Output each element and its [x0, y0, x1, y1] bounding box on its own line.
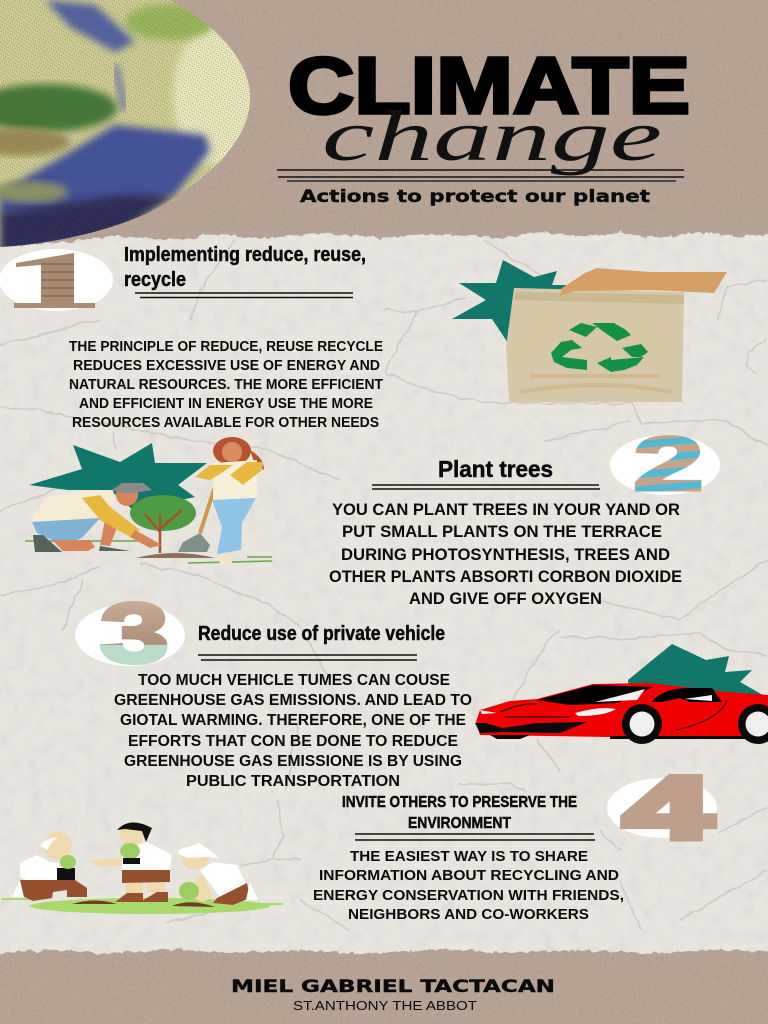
footer: school name: ST.ANTHONY THE ABBOT — [293, 998, 477, 1013]
text block: reduce private vehicle — [114, 672, 472, 790]
text block: reduce private vehicle: GREENHOUSE GAS EMISSIONE IS BY USING — [124, 753, 462, 770]
text block: reduce private vehicle: PUBLIC TRANSPORTATION — [186, 773, 400, 790]
text block: reduce reuse recycle: RESOURCES AVAILABLE FOR OTHER NEEDS — [72, 415, 379, 431]
text block: reduce reuse recycle: AND EFFICIENT IN ENERGY USE THE MORE — [79, 396, 373, 412]
illustration: three people planting seedlings — [2, 822, 283, 914]
text block: reduce reuse recycle: NATURAL RESOURCES. THE MORE EFFICIENT — [69, 377, 383, 393]
text block: plant trees: AND GIVE OFF OXYGEN — [409, 589, 602, 608]
heading: reduce reuse recycle — [124, 244, 366, 298]
number badge 4: 4 — [624, 758, 712, 857]
title rule lines — [277, 170, 684, 181]
text block: invite others: INFORMATION ABOUT RECYCLING AND — [319, 868, 619, 884]
heading: invite others — [342, 794, 595, 840]
text block: plant trees: DURING PHOTOSYNTHESIS, TREES AND — [341, 545, 670, 564]
text block: reduce private vehicle: GREENHOUSE GAS EMISSIONS. AND LEAD TO — [114, 692, 472, 709]
text block: reduce reuse recycle: THE PRINCIPLE OF REDUCE, REUSE RECYCLE — [69, 339, 383, 355]
heading: invite others: INVITE OTHERS TO PRESERVE THE — [342, 794, 577, 811]
number badge 1 — [0, 249, 113, 311]
heading: plant trees: Plant trees — [438, 456, 553, 482]
text block: plant trees: PUT SMALL PLANTS ON THE TERRACE — [342, 522, 662, 541]
text block: plant trees — [329, 500, 682, 608]
heading: reduce reuse recycle: recycle — [124, 269, 186, 291]
number badge 2: 2 — [633, 422, 704, 507]
text block: reduce private vehicle: EFFORTS THAT CON BE DONE TO REDUCE — [128, 733, 458, 750]
heading: reduce reuse recycle: Implementing reduce, reuse, — [124, 244, 366, 266]
number badge 4 — [607, 758, 717, 857]
text block: reduce private vehicle: TOO MUCH VEHICLE TUMES CAN COUSE — [138, 672, 450, 689]
text block: invite others: THE EASIEST WAY IS TO SHARE — [350, 849, 588, 865]
header torn paper band — [0, 0, 768, 245]
icon: earth globe halftone — [0, 0, 260, 255]
heading: reduce private vehicle: Reduce use of private vehicle — [198, 623, 445, 645]
illustration: couple planting a tree — [25, 437, 272, 565]
number badge 3 — [75, 586, 185, 680]
text block: invite others: NEIGHBORS AND CO-WORKERS — [348, 907, 589, 923]
icon: red sports car — [475, 644, 768, 744]
title: CLIMATE: CLIMATE — [288, 41, 690, 130]
number badge 3: 3 — [100, 586, 169, 680]
text block: reduce reuse recycle: REDUCES EXCESSIVE USE OF ENERGY AND — [73, 358, 380, 374]
icon: hand holding recycling bag — [452, 260, 727, 402]
subtitle: Actions to protect our planet — [300, 187, 650, 206]
title: change script: change — [322, 96, 662, 176]
text block: plant trees: OTHER PLANTS ABSORTI CORBON DIOXIDE — [329, 567, 682, 586]
text block: plant trees: YOU CAN PLANT TREES IN YOUR YAND OR — [332, 500, 680, 519]
footer: author name: MIEL GABRIEL TACTACAN — [231, 977, 555, 996]
number badge 2 — [610, 422, 720, 507]
text block: reduce private vehicle: GIOTAL WARMING. THEREFORE, ONE OF THE — [120, 712, 466, 729]
heading: plant trees — [372, 456, 600, 489]
text block: invite others: ENERGY CONSERVATION WITH FRIENDS, — [313, 888, 624, 904]
text block: reduce reuse recycle — [69, 339, 383, 431]
text block: invite others — [313, 849, 624, 923]
heading: invite others: ENVIRONMENT — [408, 815, 511, 832]
heading: reduce private vehicle — [198, 623, 445, 660]
footer torn paper band — [0, 949, 768, 1024]
